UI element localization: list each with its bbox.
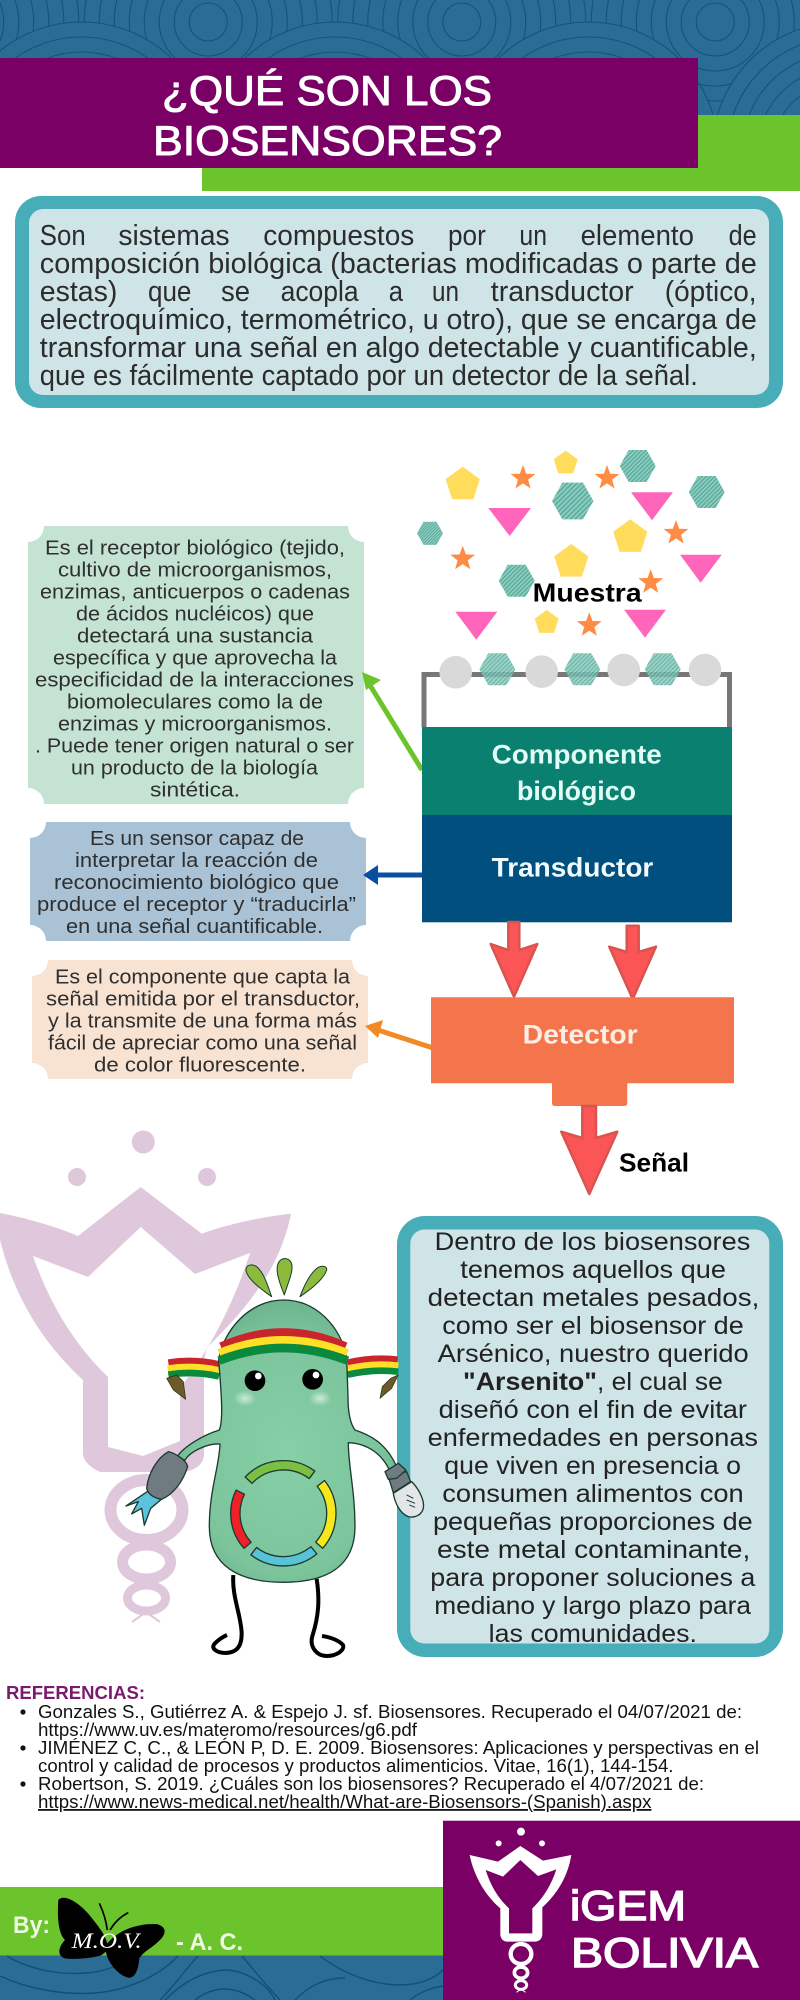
body bbox=[177, 1300, 397, 1582]
left tool bbox=[126, 1452, 188, 1525]
butterfly logo bbox=[58, 1898, 165, 1978]
definition text: un bbox=[432, 276, 459, 308]
panel: biological receptor note: de ácidos nucléicos) que bbox=[76, 604, 314, 626]
sample molecules bbox=[417, 450, 725, 640]
panel: biological receptor note: un producto de la biología bbox=[71, 758, 319, 780]
panel: transducer note: en una señal cuantificable. bbox=[66, 916, 323, 938]
panel: transducer note: Es un sensor capaz de bbox=[90, 828, 304, 850]
panel: Arsenito text: pequeñas proporciones de bbox=[433, 1508, 753, 1536]
panel: biological receptor note: específica y que aprovecha la bbox=[53, 648, 338, 670]
label: Señal: Señal bbox=[619, 1148, 689, 1178]
definition text: (óptico, bbox=[665, 276, 757, 308]
definition text: que es fácilmente captado por un detector de la señal. bbox=[40, 360, 698, 392]
icon: iGEM flower bbox=[470, 1828, 571, 1992]
panel: biological receptor note: biomoleculares como la de bbox=[67, 692, 323, 714]
panel: Arsenito text: detectan metales pesados, bbox=[428, 1284, 759, 1312]
panel: Arsenito text: "Arsenito" bbox=[463, 1368, 597, 1396]
panel: Arsenito text: enfermedades en personas bbox=[428, 1424, 758, 1452]
right ribbon bbox=[348, 1359, 398, 1375]
panel: Arsenito text: Arsénico, nuestro querido bbox=[438, 1340, 749, 1368]
block: biological component bbox=[422, 727, 732, 815]
definition text: transformar una señal en algo detectable y cuantificable, bbox=[40, 332, 757, 364]
panel: Arsenito text: este metal contaminante, bbox=[437, 1536, 750, 1564]
panel: transducer note: interpretar la reacción de bbox=[75, 850, 318, 872]
panel: biological receptor note: detectará una sustancia bbox=[77, 626, 314, 648]
definition text: se bbox=[221, 276, 250, 308]
mascot: Arsenito bbox=[126, 1259, 424, 1656]
definition text: electroquímico, termométrico, u otro), que se encarga de bbox=[40, 304, 757, 336]
arrow: to detector note bbox=[365, 1020, 433, 1048]
panel: biological receptor note bbox=[28, 526, 364, 804]
panel: Arsenito text: como ser el biosensor de bbox=[442, 1312, 744, 1340]
butterfly logo: M.O.V. bbox=[71, 1928, 142, 1953]
panel: detector note: Es el componente que capta la bbox=[55, 966, 351, 988]
block: detector: Detector bbox=[523, 1019, 638, 1049]
references: https://www.news-medical.net/health/What-are-Biosensors-(Spanish).aspx bbox=[38, 1792, 652, 1812]
panel: Arsenito text: Dentro de los biosensores bbox=[435, 1228, 750, 1256]
panel: Arsenito text: mediano y largo plazo para bbox=[434, 1592, 751, 1620]
references: Robertson, S. 2019. ¿Cuáles son los biosensores? Recuperado el 4/07/2021 de: bbox=[38, 1774, 704, 1794]
plasmid bbox=[231, 1461, 336, 1566]
block: detector bbox=[431, 997, 734, 1106]
panel: biological receptor note: Es el receptor biológico (tejido, bbox=[45, 538, 345, 560]
title: ¿QUÉ SON LOS bbox=[162, 67, 492, 114]
definition text: Son bbox=[40, 220, 86, 252]
panel: Arsenito text: tenemos aquellos que bbox=[460, 1256, 726, 1284]
panel: biological receptor note: cultivo de microorganismos, bbox=[58, 560, 332, 582]
block: biological component: Componente bbox=[492, 739, 662, 769]
panel: Arsenito text: consumen alimentos con bbox=[442, 1480, 744, 1508]
references: Gonzales S., Gutiérrez A. & Espejo J. sf. Biosensores. Recuperado el 04/07/2021 de: bbox=[38, 1702, 742, 1722]
arrow: transducer to detector left bbox=[491, 922, 537, 997]
definition text: acopla bbox=[281, 276, 359, 308]
label: Muestra: Muestra bbox=[533, 578, 642, 608]
logo wordmark bbox=[570, 1882, 758, 1976]
left ribbon bbox=[168, 1361, 219, 1376]
panel: transducer note bbox=[30, 822, 366, 941]
panel: Arsenito text: que viven en presencia o bbox=[444, 1452, 741, 1480]
arrow: to receptor note bbox=[362, 672, 422, 770]
panel: Arsenito text: diseñó con el fin de evitar bbox=[439, 1396, 747, 1424]
references: REFERENCIAS: bbox=[6, 1683, 145, 1703]
logo wordmark: iGEM bbox=[570, 1882, 686, 1929]
panel: transducer note: produce el receptor y “traducirla” bbox=[37, 894, 356, 916]
references bbox=[6, 1683, 759, 1812]
footer credit: A. C.: - A. C. bbox=[176, 1929, 243, 1956]
panel: transducer note: reconocimiento biológico que bbox=[54, 872, 339, 894]
sensor frame with receptors bbox=[424, 653, 730, 727]
panel: Arsenito text: , el cual se bbox=[597, 1368, 723, 1396]
panel: biological receptor note: sintética. bbox=[150, 780, 240, 802]
definition text: transductor bbox=[491, 276, 634, 308]
panel: Arsenito text bbox=[397, 1216, 783, 1657]
header pattern band bbox=[0, 0, 800, 116]
title: BIOSENSORES? bbox=[153, 117, 502, 164]
definition text: compuestos bbox=[263, 220, 414, 252]
definition text: estas) bbox=[40, 276, 117, 308]
definition text: por bbox=[448, 220, 486, 252]
definition text: sistemas bbox=[118, 220, 230, 252]
definition text: a bbox=[389, 276, 404, 308]
footer green bar bbox=[0, 1887, 443, 1956]
panel: biological receptor note: . Puede tener origen natural o ser bbox=[35, 736, 354, 758]
block: biological component: biológico bbox=[517, 776, 636, 806]
headband bbox=[219, 1332, 348, 1361]
panel: iGEM Bolivia logo bbox=[443, 1821, 800, 2000]
watermark logo bbox=[0, 1130, 291, 1622]
definition text: elemento bbox=[581, 220, 694, 252]
footer credit: By: By: bbox=[13, 1912, 50, 1939]
definition text: un bbox=[519, 220, 547, 252]
title banner bbox=[0, 58, 698, 168]
definition text: composición biológica (bacterias modificadas o parte de bbox=[40, 248, 757, 280]
panel: detector note: señal emitida por el transductor, bbox=[46, 988, 360, 1010]
arrow: to transducer note bbox=[363, 865, 424, 885]
references: control y calidad de procesos y productos alimenticios. Vitae, 16(1), 144-154. bbox=[38, 1756, 674, 1776]
title bbox=[153, 67, 502, 164]
panel: detector note: y la transmite de una forma más bbox=[48, 1010, 357, 1032]
panel: biological receptor note: enzimas, anticuerpos o cadenas bbox=[40, 582, 350, 604]
panel: detector note: fácil de apreciar como una señal bbox=[48, 1032, 357, 1054]
header green bar bbox=[202, 115, 800, 191]
definition text bbox=[40, 220, 757, 392]
references: JIMÉNEZ C, C., & LEÓN P, D. E. 2009. Biosensores: Aplicaciones y perspectivas en el bbox=[38, 1737, 759, 1758]
block: transducer bbox=[422, 815, 732, 922]
eyes bbox=[234, 1369, 331, 1406]
panel: biological receptor note: enzimas y microorganismos. bbox=[58, 714, 332, 736]
panel: Arsenito text: las comunidades. bbox=[489, 1620, 697, 1648]
arrow: signal output bbox=[561, 1106, 617, 1194]
arrow: transducer to detector right bbox=[609, 926, 656, 999]
block: transducer: Transductor bbox=[492, 853, 654, 883]
definition text: de bbox=[729, 220, 757, 252]
definition text: que bbox=[148, 276, 191, 308]
references: https://www.uv.es/materomo/resources/g6.pdf bbox=[38, 1720, 418, 1740]
panel: Arsenito text: para proponer soluciones a bbox=[430, 1564, 755, 1592]
panel: definition bbox=[15, 196, 783, 408]
right tool bbox=[385, 1463, 424, 1517]
sprouts bbox=[246, 1259, 327, 1297]
panel: biological receptor note: especificidad de la interacciones bbox=[35, 670, 354, 692]
panel: detector note: de color fluorescente. bbox=[94, 1054, 306, 1076]
footer pattern band bbox=[0, 1956, 443, 2000]
logo wordmark: BOLIVIA bbox=[571, 1929, 758, 1976]
panel: detector note bbox=[32, 960, 368, 1079]
